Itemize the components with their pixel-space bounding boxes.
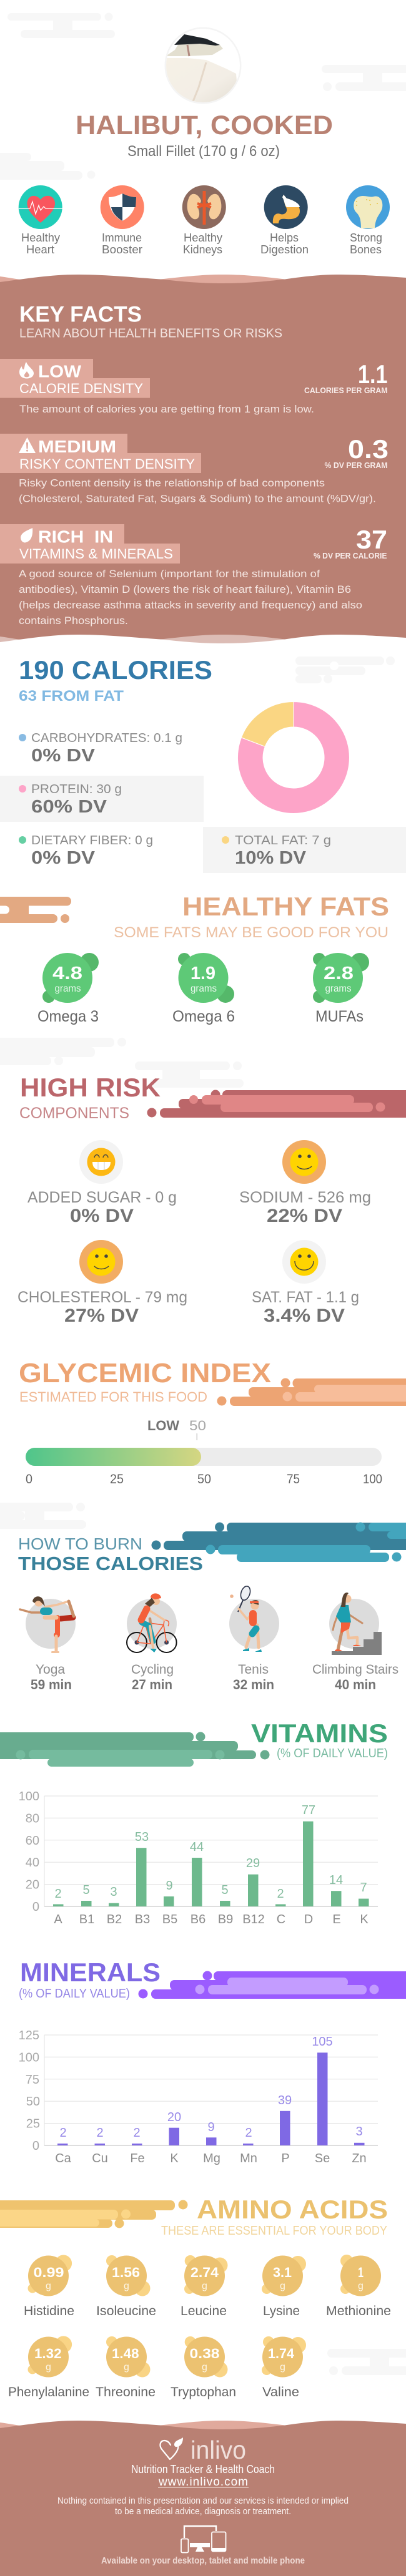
heading: how to burn: HOW TO BURN: [18, 1534, 142, 1553]
bar chart: vitamins: 40: [26, 1856, 39, 1870]
availability note: Available on your desktop, tablet and mobile phone: [101, 2555, 305, 2566]
badge: omega 6: [172, 953, 235, 1025]
bar chart: vitamins: 9: [166, 1879, 173, 1893]
row: dietary fiber: DIETARY FIBER: 0 g: [31, 834, 153, 847]
description: [19, 568, 362, 627]
gauge scale: 50: [197, 1472, 211, 1486]
bar chart: minerals: 20: [167, 2110, 181, 2124]
badge: valine: [262, 2336, 306, 2399]
badge: threonine: g: [124, 2362, 129, 2373]
activity durations: 32 min: [233, 1677, 274, 1692]
gauge scale: 0: [26, 1472, 32, 1486]
bar chart: minerals: 100: [19, 2051, 39, 2064]
bar chart: vitamins: D: [304, 1913, 313, 1926]
label: helps digestion: [260, 232, 309, 256]
unit: calories per gram: CALORIES PER GRAM: [304, 386, 387, 395]
badge: histidine: [24, 2255, 74, 2318]
decoration: vitamin bars: [0, 1732, 270, 1767]
badge: histidine: 0.99: [34, 2265, 64, 2280]
label: strong bones: [350, 232, 382, 256]
bar chart: minerals: 25: [26, 2117, 40, 2131]
subheading: key facts: LEARN ABOUT HEALTH BENEFITS OR RISKS: [19, 327, 282, 341]
section: vitamins: [0, 1719, 388, 1926]
row: carbohydrates: [19, 731, 182, 766]
activity labels: Yoga: [36, 1662, 65, 1677]
badge: leucine: g: [202, 2281, 207, 2291]
label: strong bones: Bones: [350, 243, 382, 256]
icon: helps digestion: [264, 185, 308, 229]
benefit icons row: [19, 185, 390, 256]
subheading: 63 from fat: 63 FROM FAT: [19, 688, 124, 705]
row: carbohydrates: CARBOHYDRATES: 0.1 g: [31, 731, 182, 745]
badge: omega 6: Omega 6: [172, 1008, 235, 1025]
bar chart: vitamins: B2: [107, 1913, 122, 1926]
bar chart: vitamins: B12: [242, 1913, 265, 1926]
section: high risk components: [17, 1073, 406, 1326]
icon: immune booster: [101, 185, 144, 229]
item: sodium: 22% DV: [267, 1206, 342, 1226]
badge: lysine: g: [280, 2281, 285, 2291]
decoration: glycemic bars: [217, 1378, 406, 1406]
activity labels: Climbing Stairs: [312, 1662, 399, 1677]
footer: [0, 2421, 406, 2576]
row: protein: PROTEIN: 30 g: [31, 783, 122, 796]
bar chart: minerals: 0: [32, 2139, 39, 2153]
activity: climbing stairs: [329, 1593, 382, 1655]
decoration: amino bars: [0, 2200, 187, 2228]
badge: isoleucine: [96, 2255, 156, 2318]
bar chart: minerals: 2: [96, 2126, 104, 2140]
bar chart: minerals: 39: [278, 2094, 292, 2107]
bar chart: vitamins: 20: [26, 1878, 39, 1892]
bar chart: vitamins: K: [360, 1913, 369, 1926]
donut chart: [237, 701, 349, 813]
description: A good source of Selenium (important for the stimulation of: [19, 568, 320, 580]
title: HALIBUT, COOKED: [76, 110, 333, 140]
bar chart: minerals: K: [170, 2152, 179, 2165]
activity: yoga: [20, 1596, 76, 1653]
item: saturated fat: 3.4% DV: [264, 1305, 345, 1326]
bar chart: minerals: 50: [26, 2095, 40, 2109]
gauge scale: [26, 1472, 382, 1486]
heading: vitamins: VITAMINS: [251, 1719, 388, 1748]
label: low: LOW: [38, 362, 82, 381]
activity: cycling: [127, 1593, 177, 1652]
badge: mufas: 2.8: [324, 964, 354, 983]
heading: minerals: MINERALS: [20, 1958, 161, 1987]
bar chart: minerals: 2: [59, 2126, 67, 2140]
gauge scale: 75: [287, 1472, 300, 1486]
row: total fat: 10% DV: [235, 848, 307, 868]
badge: leucine: Leucine: [181, 2304, 227, 2318]
activity durations: 59 min: [31, 1677, 72, 1692]
bar chart: vitamins: 44: [190, 1840, 204, 1854]
bar chart: vitamins: A: [54, 1913, 62, 1926]
description: Risky Content density is the relationship of bad components: [19, 477, 325, 489]
badge: valine: Valine: [262, 2385, 299, 2399]
badge: tryptophan: Tryptophan: [171, 2385, 236, 2399]
badge: tryptophan: g: [202, 2362, 207, 2373]
badge: omega 6: grams: [191, 983, 217, 994]
badge: tryptophan: 0.38: [190, 2346, 220, 2361]
badge: threonine: Threonine: [96, 2385, 156, 2399]
item: cholesterol: 27% DV: [64, 1305, 139, 1326]
item: sodium: [239, 1140, 371, 1226]
label: risky content density: RISKY CONTENT DENSITY: [19, 456, 195, 472]
badge: lysine: Lysine: [263, 2304, 300, 2318]
bar chart: vitamins: 53: [135, 1830, 149, 1844]
activity durations: [31, 1677, 376, 1692]
label: immune booster: Immune: [102, 232, 142, 244]
heading: amino acids: AMINO ACIDS: [197, 2195, 388, 2224]
heading: healthy fats: HEALTHY FATS: [182, 892, 389, 921]
badge: phenylalanine: 1.32: [34, 2346, 61, 2361]
bar chart: minerals: Se: [315, 2152, 330, 2165]
bar chart: vitamins: 60: [26, 1834, 39, 1848]
section: calories: [0, 655, 406, 873]
label: healthy kidneys: Kidneys: [183, 243, 222, 256]
label: healthy kidneys: [183, 232, 222, 256]
item: cholesterol: [17, 1240, 187, 1326]
activity durations: 40 min: [335, 1677, 376, 1692]
subheading: percent daily value: (% OF DAILY VALUE): [19, 1987, 130, 2001]
logo text: inlivo: inlivo: [191, 2436, 246, 2464]
badge: tryptophan: [171, 2336, 236, 2399]
gauge scale: 100: [363, 1472, 382, 1486]
logo icon: heart with leaf: [160, 2437, 183, 2459]
row: dietary fiber: [19, 834, 153, 868]
row: total fat: TOTAL FAT: 7 g: [235, 834, 331, 847]
heading: 190 calories: 190 CALORIES: [19, 655, 212, 685]
icon: leaf: [21, 528, 32, 543]
decoration: high risk bars: [147, 1090, 406, 1118]
item: added sugar: 0% DV: [70, 1206, 134, 1226]
row: protein: [0, 776, 204, 822]
website: www.inlivo.com: [158, 2476, 248, 2489]
gauge label: low: LOW: [147, 1418, 179, 1433]
label: rich in: RICH IN: [38, 527, 113, 547]
activity labels: [36, 1662, 399, 1677]
item: sodium: SODIUM - 526 mg: [239, 1189, 371, 1206]
bar chart: vitamins: 29: [246, 1856, 260, 1870]
badge: mufas: grams: [325, 983, 351, 994]
bar chart: vitamins: 100: [19, 1790, 39, 1803]
row: carbohydrates: 0% DV: [31, 746, 96, 766]
bar chart: vitamins: 2: [54, 1887, 62, 1901]
heading: those calories: THOSE CALORIES: [18, 1553, 203, 1574]
label: healthy kidneys: Healthy: [184, 232, 222, 244]
badge: lysine: [262, 2255, 306, 2318]
bar chart: minerals: 75: [26, 2073, 39, 2087]
badge: omega 3: 4.8: [52, 964, 82, 983]
activity: tennis: [229, 1585, 279, 1652]
item: added sugar: [27, 1140, 177, 1226]
subheading: essential: THESE ARE ESSENTIAL FOR YOUR BODY: [161, 2224, 387, 2238]
item: cholesterol: CHOLESTEROL - 79 mg: [17, 1289, 187, 1306]
item: added sugar: ADDED SUGAR - 0 g: [27, 1189, 177, 1206]
badge: methionine: g: [358, 2281, 364, 2291]
serving size: Small Fillet (170 g / 6 oz): [127, 143, 280, 160]
badge: valine: 1.74: [268, 2346, 295, 2361]
value: 0.3: 0.3: [348, 434, 389, 464]
fact: medium risky content: [0, 434, 389, 504]
icon: healthy heart: [19, 185, 62, 229]
label: vitamins and minerals: VITAMINS & MINERALS: [19, 546, 173, 562]
badge: methionine: 1: [358, 2265, 364, 2280]
badge: phenylalanine: g: [46, 2362, 51, 2373]
section: how to burn calories: [18, 1523, 406, 1692]
bar chart: vitamins: B3: [135, 1913, 150, 1926]
heading: key facts: KEY FACTS: [19, 302, 142, 327]
badge: omega 3: grams: [55, 983, 81, 994]
tagline: Nutrition Tracker & Health Coach: [131, 2463, 275, 2476]
unit: percent dv per gram: % DV PER GRAM: [325, 461, 387, 470]
bar chart: vitamins: C: [277, 1913, 285, 1926]
bar chart: vitamins: [19, 1790, 378, 1926]
bar chart: minerals: Zn: [352, 2152, 367, 2165]
badge: methionine: Methionine: [326, 2304, 391, 2318]
badge: isoleucine: g: [124, 2281, 129, 2291]
background clouds: header: [0, 12, 406, 180]
section: amino acids: [0, 2195, 406, 2399]
label: helps digestion: Helps: [270, 232, 299, 244]
badge: isoleucine: 1.56: [112, 2265, 140, 2280]
row: dietary fiber: 0% DV: [31, 848, 96, 868]
fact: rich in vitamins and minerals: [0, 524, 387, 627]
icon: warning triangle: [19, 437, 36, 453]
gauge value: 50: 50: [189, 1418, 206, 1433]
description: [19, 477, 376, 504]
label: healthy heart: Heart: [26, 243, 54, 256]
bar chart: vitamins: 77: [302, 1803, 315, 1817]
gauge scale: 25: [110, 1472, 124, 1486]
badge: omega 3: [37, 953, 99, 1025]
badge: omega 3: Omega 3: [37, 1008, 99, 1025]
label: healthy heart: [21, 232, 60, 256]
bar chart: vitamins: 3: [110, 1885, 117, 1899]
bar chart: minerals: 105: [312, 2035, 333, 2049]
badge: methionine: [326, 2255, 391, 2318]
bar chart: minerals: Mg: [203, 2152, 220, 2165]
badge: histidine: Histidine: [24, 2304, 74, 2318]
bar chart: minerals: 2: [133, 2126, 141, 2140]
bar chart: vitamins: 0: [32, 1900, 39, 1914]
bar chart: minerals: Fe: [130, 2152, 145, 2165]
decoration: burn bars: [151, 1523, 406, 1562]
activity labels: Tenis: [238, 1662, 269, 1677]
bar chart: vitamins: 2: [277, 1887, 284, 1901]
label: healthy heart: Healthy: [21, 232, 60, 244]
badge: phenylalanine: Phenylalanine: [8, 2385, 89, 2399]
subheading: components: COMPONENTS: [19, 1105, 129, 1122]
badge: valine: g: [280, 2362, 285, 2373]
decoration: healthy fats bars: [0, 897, 71, 923]
badge: phenylalanine: [8, 2336, 89, 2399]
label: helps digestion: Digestion: [260, 243, 309, 256]
badge: mufas: [313, 953, 369, 1025]
badge: threonine: [96, 2336, 156, 2399]
bar chart: vitamins: B9: [218, 1913, 233, 1926]
description: (Cholesterol, Saturated Fat, Sugars & Sodium) to the amount (%DV/gr).: [19, 493, 376, 504]
unit: percent dv per calorie: % DV PER CALORIE: [314, 551, 387, 560]
description: The amount of calories you are getting from 1 gram is low.: [19, 403, 314, 415]
label: immune booster: Booster: [102, 243, 142, 256]
subheading: estimated: ESTIMATED FOR THIS FOOD: [19, 1389, 207, 1405]
section: glycemic index: [19, 1358, 406, 1486]
bar chart: minerals: Mn: [240, 2152, 257, 2165]
value: 1.1: 1.1: [358, 359, 387, 389]
panel: key facts: [0, 275, 406, 653]
bar chart: minerals: 9: [207, 2120, 215, 2134]
label: strong bones: Strong: [350, 232, 382, 244]
section: minerals: [19, 1958, 406, 2165]
item: saturated fat: [252, 1240, 359, 1326]
badge: omega 6: 1.9: [191, 964, 215, 983]
decoration: mineral bars: [139, 1971, 406, 1999]
badge: leucine: 2.74: [191, 2265, 219, 2280]
bar chart: vitamins: E: [332, 1913, 341, 1926]
value: 37: 37: [356, 525, 387, 554]
heading: high risk: HIGH RISK: [20, 1073, 161, 1102]
gauge bar: [26, 1433, 382, 1466]
label: calorie density: CALORIE DENSITY: [19, 381, 143, 396]
badge: lysine: 3.1: [273, 2265, 292, 2280]
bar chart: minerals: Cu: [92, 2152, 108, 2165]
label: medium: MEDIUM: [38, 437, 116, 456]
badge: isoleucine: Isoleucine: [96, 2304, 156, 2318]
bar chart: vitamins: B5: [162, 1913, 177, 1926]
row: protein: 60% DV: [31, 797, 107, 817]
badge: leucine: [181, 2255, 227, 2318]
bar chart: vitamins: B6: [191, 1913, 205, 1926]
heading: glycemic index: GLYCEMIC INDEX: [19, 1358, 271, 1388]
description: antibodies), Vitamin D (lowers the risk of heart failure), Vitamin B6: [19, 583, 351, 595]
badge: mufas: MUFAs: [315, 1008, 364, 1025]
item: saturated fat: SAT. FAT - 1.1 g: [252, 1289, 359, 1306]
bar chart: vitamins: 14: [329, 1873, 343, 1887]
disclaimer: to be a medical advice, diagnosis or treatment.: [115, 2506, 291, 2517]
disclaimer: [57, 2496, 349, 2517]
description: (helps decrease asthma attacks in severity and frequency) and also: [19, 599, 362, 611]
bar chart: minerals: 3: [355, 2125, 363, 2139]
bar chart: minerals: 2: [245, 2126, 252, 2140]
icon: healthy kidneys: [182, 185, 226, 229]
bar chart: vitamins: 5: [221, 1883, 229, 1897]
badge: histidine: g: [46, 2281, 51, 2291]
disclaimer: Nothing contained in this presentation and our services is intended or implied: [57, 2496, 349, 2506]
bar chart: minerals: P: [281, 2152, 290, 2165]
label: immune booster: [102, 232, 142, 256]
icon: strong bones: [346, 185, 390, 229]
bar chart: vitamins: 80: [26, 1812, 39, 1825]
section: healthy fats: [0, 892, 389, 1025]
bar chart: vitamins: 7: [360, 1881, 367, 1895]
bar chart: minerals: Ca: [55, 2152, 72, 2165]
bar chart: minerals: [19, 2029, 378, 2165]
badge: threonine: 1.48: [112, 2346, 139, 2361]
icon: devices: [181, 2526, 226, 2552]
bar chart: minerals: 125: [19, 2029, 39, 2042]
bar chart: vitamins: 5: [82, 1883, 90, 1897]
bar chart: vitamins: B1: [79, 1913, 94, 1926]
icon: flame: [19, 362, 34, 378]
subheading: percent daily value: (% OF DAILY VALUE): [277, 1747, 388, 1760]
subheading: some fats: SOME FATS MAY BE GOOD FOR YOU: [114, 924, 389, 941]
row: total fat: [203, 827, 406, 873]
activity durations: 27 min: [132, 1677, 172, 1692]
description: contains Phosphorus.: [19, 615, 128, 627]
activity labels: Cycling: [131, 1662, 174, 1677]
food photo: halibut fillet: [164, 27, 241, 106]
fact: low calorie density: [0, 359, 387, 415]
